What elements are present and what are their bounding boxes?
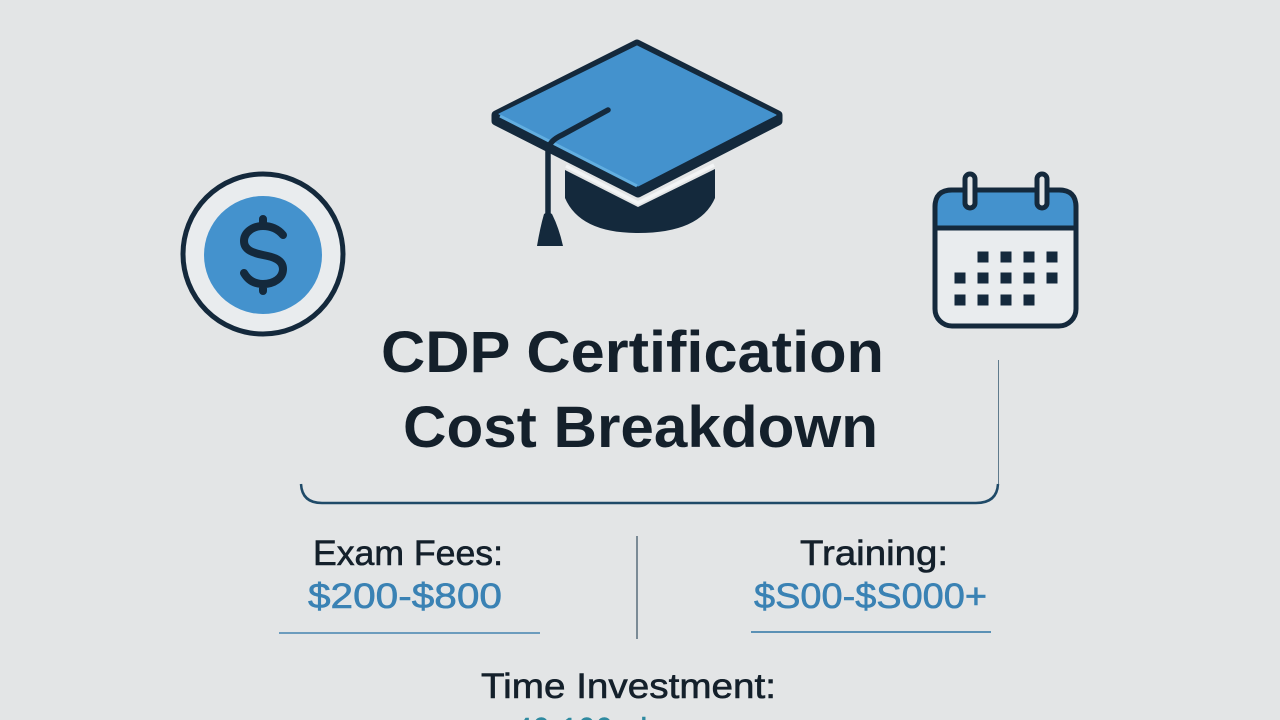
title: CDP Certification (381, 320, 884, 385)
time investment block (481, 667, 776, 720)
training block (751, 534, 991, 633)
training block: Training: (800, 534, 948, 573)
vertical divider (636, 536, 638, 639)
icon: calendar (935, 174, 1076, 326)
time investment block: Time Investment: (481, 667, 776, 706)
exam fees block: $200-$800 (308, 577, 502, 616)
exam fees block: Exam Fees: (313, 534, 503, 573)
title: Cost Breakdown (403, 395, 878, 460)
icon: graduation cap (496, 44, 778, 246)
exam fees block (279, 534, 540, 634)
icon: dollar coin (183, 174, 343, 334)
title bracket line (301, 360, 998, 503)
training block: $S00-$S000+ (754, 577, 987, 616)
title (381, 320, 884, 460)
